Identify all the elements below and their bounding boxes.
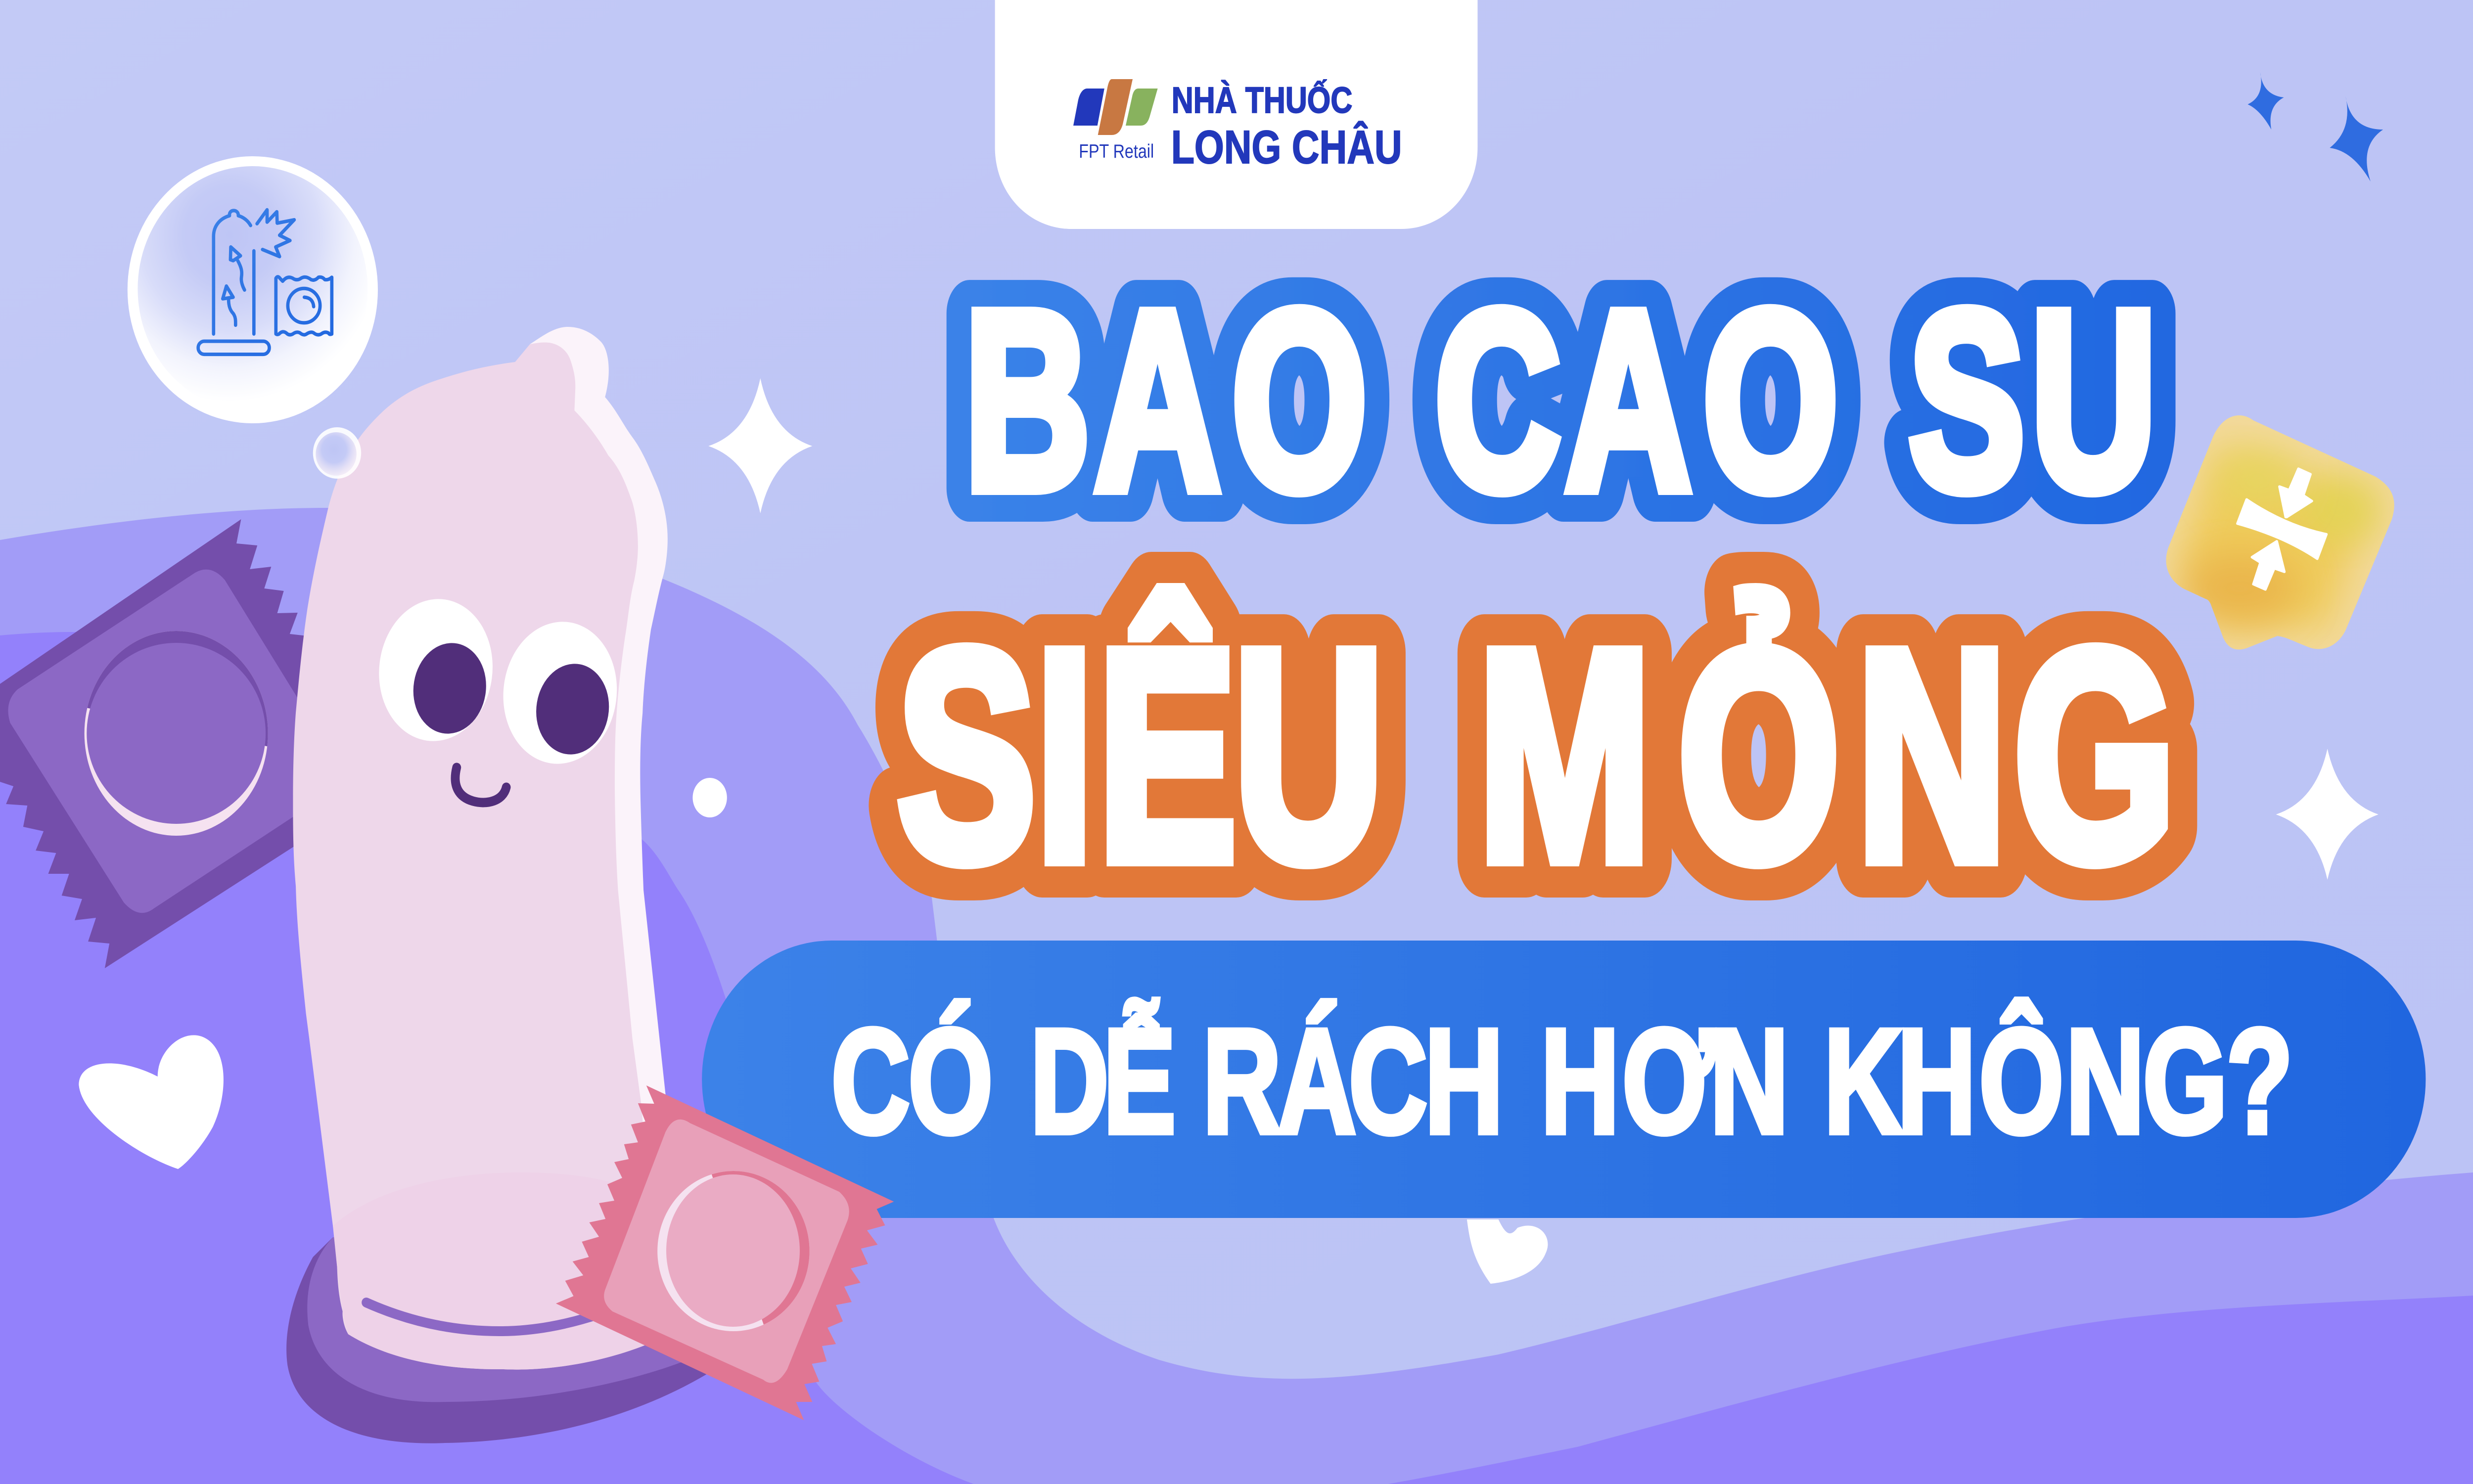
logo text: FPT Retail: FPT Retail: [1079, 141, 1154, 162]
icon: packet purple: [0, 519, 324, 968]
icon: packet pink: [556, 1085, 894, 1420]
icon: small bubble: [313, 427, 361, 479]
decorative sparkle right: [2276, 749, 2379, 880]
eye right: [495, 614, 625, 772]
icon: compress arrows: [2238, 469, 2327, 589]
condom rim line: [366, 1303, 603, 1331]
icon: broken condom and packet line art: [198, 210, 332, 355]
eye left: [370, 591, 501, 749]
logo mark: FPT bars: [1073, 79, 1158, 135]
title line 1: BAO CAO SU: BAO CAO SU: [964, 259, 2156, 542]
packet ring: [85, 631, 268, 836]
icon: condom character body: [293, 342, 672, 1370]
packet ring pink: [657, 1171, 810, 1331]
panel: logo card: [995, 0, 1477, 229]
icon: white heart left: [79, 1035, 224, 1169]
condom lower sheen: [333, 1172, 672, 1370]
title line 2: SIÊU MỎNG: SIÊU MỎNG: [897, 587, 2176, 923]
icon: white heart under pill: [1467, 1219, 1548, 1284]
title line 2: SIÊU MỎNG: SIÊU MỎNG: [897, 587, 2176, 923]
smile: [455, 767, 506, 803]
icon: condom body strip: [530, 327, 677, 1197]
icon: big bubble: [128, 156, 378, 423]
decorative dot: [692, 778, 727, 817]
logo text: Long Châu: LONG CHÂU: [1171, 121, 1402, 174]
icon: condom base: [286, 1212, 723, 1443]
icon: yellow badge thin: [2166, 415, 2394, 649]
decorative blue sparkle small: [2247, 72, 2284, 130]
logo text: Nhà Thuốc: NHÀ THUỐC: [1172, 79, 1352, 121]
decorative sparkle left: [708, 378, 812, 513]
background wave: deep purple: [0, 632, 2473, 1484]
panel: question pill: [702, 941, 2426, 1218]
background wave: light purple: [0, 508, 2473, 1484]
subtitle: question: CÓ DỄ RÁCH HƠN KHÔNG?: [831, 998, 2293, 1164]
title line 1: BAO CAO SU: BAO CAO SU: [964, 259, 2156, 542]
decorative blue sparkle large: [2330, 96, 2383, 181]
